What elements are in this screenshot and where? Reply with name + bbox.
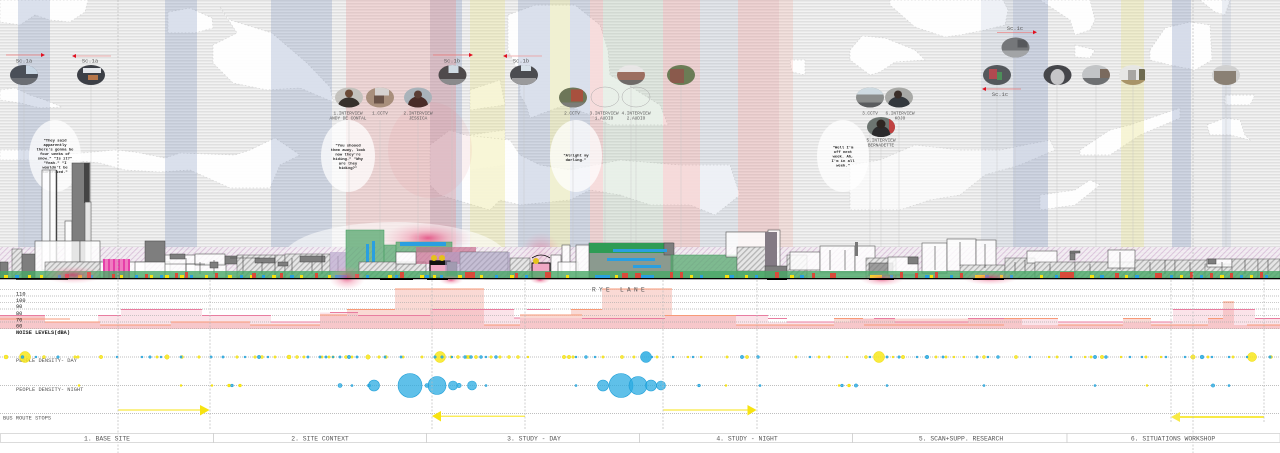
scene 1a arrows: Sc.1a (16, 58, 33, 64)
speech bubble: Scan: week. Ah, (833, 154, 853, 160)
bus arrow: west 1 (432, 411, 525, 422)
noise axis labels: 60 (16, 324, 22, 330)
people density night row: PEOPLE DENSITY- NIGHT (16, 387, 83, 393)
photo: Sc.1c lower (983, 65, 1011, 85)
speech bubble: Base Site: surprised." (42, 170, 68, 175)
speech bubble: Site Context: them away, look (331, 148, 366, 153)
speech bubble: Scan: week." (836, 164, 850, 169)
green block: site context (330, 230, 530, 278)
speech bubble: Base Site (29, 120, 81, 192)
speech bubble: Base Site: snow." "Is it?" (38, 157, 72, 162)
skyline buildings (0, 163, 1280, 278)
speech bubble: Scan: off next (834, 150, 852, 155)
photo captions: 1.AUDIO (595, 116, 614, 122)
noise title: NOISE LEVELS(dBA) (16, 330, 70, 336)
speech bubble: Study Day: "Alright my (563, 153, 589, 158)
tab frame (0, 434, 1280, 442)
noise night line (0, 289, 1280, 325)
speech bubble: Site Context: are they (339, 162, 358, 167)
audio outline ellipses (591, 87, 650, 107)
bottom navigation tabs (0, 434, 1280, 442)
scene 1b arrows: Sc.1b (513, 58, 529, 64)
scene labels and direction arrows (6, 26, 1037, 98)
speech bubble: Base Site: four weeks of (40, 152, 71, 157)
speech bubble: Site Context: now they're (335, 153, 361, 158)
photo: Sc.1a left (10, 65, 38, 85)
noise day line (0, 310, 1280, 322)
scene 1a arrows: Sc.1a (82, 58, 99, 64)
tab labels: 2. SITE CONTEXT (291, 436, 349, 442)
bus arrow: east 2 (663, 405, 756, 416)
ground-level pink glows (43, 266, 1018, 290)
photo captions (330, 112, 915, 148)
photo: interview Andy (335, 88, 363, 108)
blue night dots (231, 374, 1230, 398)
ground line (0, 278, 1280, 280)
scene 1c arrows (982, 26, 1037, 98)
yellow day dots (4, 352, 1272, 362)
skyline hatch band (0, 247, 1280, 272)
photo: Sc.1b left (438, 65, 466, 85)
photo: CCTV 2 (559, 88, 587, 108)
photo: CCTV 1 (366, 88, 394, 108)
photo: Sc.1a right (77, 65, 105, 85)
noise axis labels: 110 (16, 292, 26, 298)
green block: study (576, 243, 767, 278)
photo: Sc.1c top (1002, 38, 1030, 58)
sky background with horizontal lines (0, 0, 1280, 280)
photo: far right (1212, 65, 1240, 85)
sound domes (283, 102, 563, 294)
speech bubble: Site Context (321, 120, 375, 192)
photo: CCTV 3 (856, 88, 884, 108)
photo: Sc.1b right (510, 65, 538, 85)
photo captions: 2.INTERVIEW (404, 112, 433, 116)
low terraces (165, 254, 338, 278)
photo: tunnel (1044, 65, 1072, 85)
noise axis labels: 70 (16, 318, 22, 324)
tab labels: 3. STUDY - DAY (507, 436, 561, 442)
photo captions: 1.CCTV (372, 112, 388, 116)
photo captions: 5.INTERVIEW (867, 138, 896, 144)
speech bubble: Base Site: "Yeah." "I (43, 161, 67, 166)
right terraces (787, 239, 1280, 278)
photo: street (617, 65, 645, 85)
photo: interview Kojo (885, 88, 913, 108)
vertical colour bands (18, 0, 1231, 250)
yellow night dots (78, 384, 1148, 387)
noise dotted grid (0, 289, 1280, 329)
leader lines from photos (24, 57, 1226, 250)
photo captions: 4.INTERVIEW (622, 112, 651, 116)
tab labels: 4. STUDY - NIGHT (716, 436, 778, 442)
photo: interview Jessica (404, 88, 432, 108)
tab labels: 5. SCAN+SUPP. RESEARCH (919, 436, 1003, 442)
photo captions: JESSICA (409, 116, 428, 122)
people density day row (0, 352, 1280, 364)
photo: yellow band building (1119, 65, 1147, 85)
bus arrow: west 2 (1171, 412, 1264, 422)
speech bubble: Study Day: darling." (566, 158, 586, 163)
scene 1b arrows: Sc.1b (444, 58, 460, 64)
speech bubble: Base Site: wouldn't be (42, 166, 68, 171)
photo captions: 1.INTERVIEW (334, 112, 363, 116)
pink kiosk (532, 245, 578, 278)
tall white block (726, 230, 787, 278)
photo captions: ANDY DE CONTAL (330, 116, 367, 122)
photo captions: KOJO (895, 116, 906, 122)
speech bubble: Scan: I'm in all (831, 159, 855, 164)
noise axis labels: 80 (16, 311, 22, 317)
scene 1b arrows (433, 53, 542, 64)
speech bubble: Base Site: apparently (43, 143, 67, 148)
tower: left cluster (0, 163, 170, 278)
photo captions: BERNADETTE (868, 144, 895, 148)
blue day dots (21, 352, 1271, 362)
speech bubble: Base Site: "They said (43, 139, 67, 144)
people density day row: PEOPLE DENSITY- DAY (16, 358, 78, 364)
speech bubble: Site Context: hiding?" (339, 166, 357, 171)
tab labels (84, 436, 1215, 442)
photo captions: 2.CCTV (564, 112, 580, 116)
photo captions: 3.CCTV (862, 112, 878, 116)
tab labels: 1. BASE SITE (84, 436, 130, 442)
speech bubble: Study Day (550, 120, 602, 192)
photo: interview Bernadette (867, 117, 895, 137)
scene 1a arrows (6, 53, 111, 64)
white clouds (0, 0, 1255, 215)
bus route row (0, 405, 1280, 422)
bus route row: BUS ROUTE STOPS (3, 416, 51, 422)
speech bubble: Site Context: hiding." "Why (333, 157, 364, 162)
bus arrow: east 1 (118, 405, 210, 416)
photo: brick house (667, 65, 695, 85)
speech bubble: Scan (817, 120, 869, 192)
scene 1c arrows: Sc.1c (1007, 26, 1023, 32)
noise axis labels: 100 (16, 298, 26, 304)
noise axis labels: 90 (16, 304, 22, 310)
street name: RYE LANE (592, 286, 648, 294)
photo captions: 2.AUDIO (627, 116, 646, 122)
street-level green band (0, 271, 1280, 278)
photo: road (1082, 65, 1110, 85)
speech bubble: Base Site: there's gonna be (37, 148, 74, 153)
people density night row (0, 374, 1280, 398)
scene 1c arrows: Sc.1c (992, 92, 1008, 98)
tab labels: 6. SITUATIONS WORKSHOP (1131, 436, 1215, 442)
speech bubble: Scan: "Well I'm (833, 145, 854, 150)
noise level chart (0, 286, 1280, 336)
speech bubble: Site Context: "You shooed (335, 144, 361, 149)
photo captions: 3.INTERVIEW (590, 112, 619, 116)
photo captions: 6.INTERVIEW (886, 112, 915, 116)
noise fill areas (0, 289, 1280, 329)
